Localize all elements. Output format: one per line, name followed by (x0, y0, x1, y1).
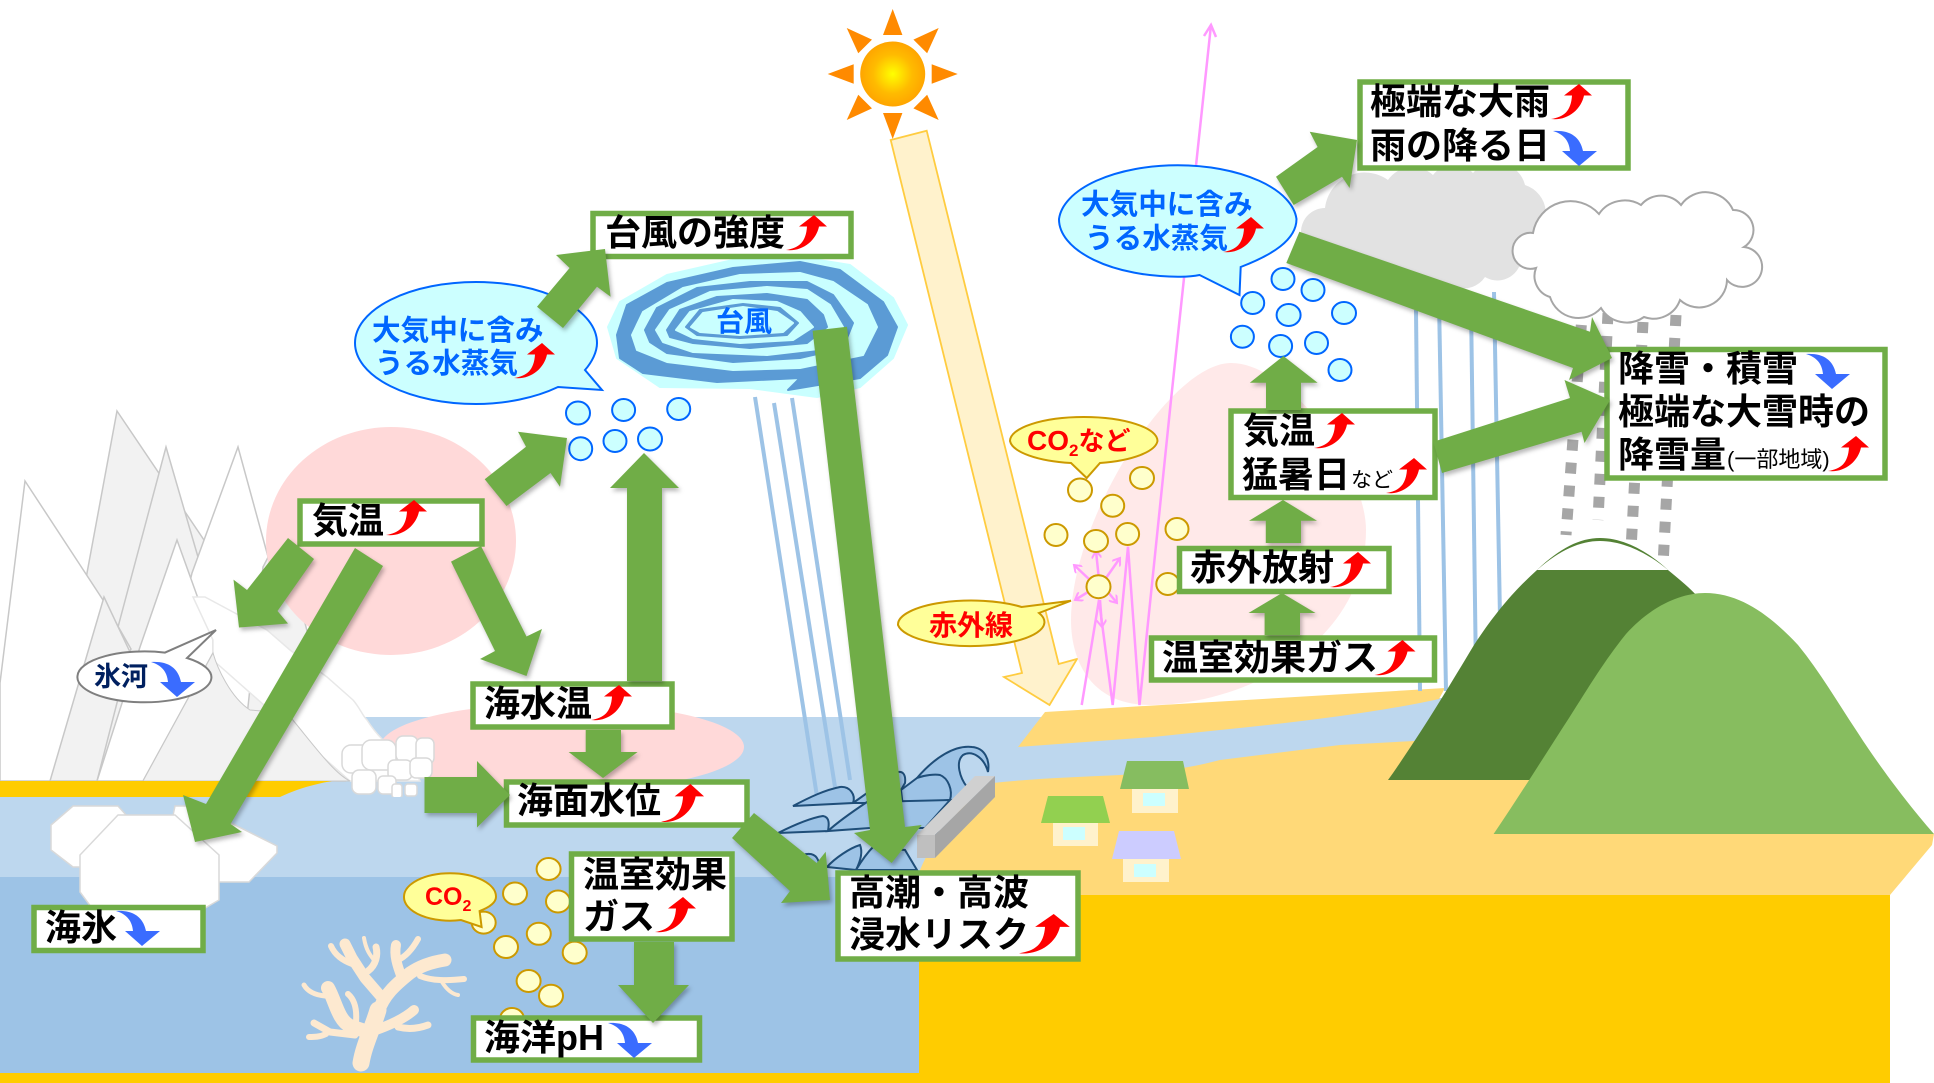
sea: upper layer (0, 797, 919, 1073)
snowfall dotted lines (1566, 302, 1676, 565)
ground cross-section (0, 895, 1890, 1083)
land: main sand (919, 741, 1934, 895)
sea ice (51, 806, 277, 911)
box: sea level: 海面水位 (517, 780, 661, 821)
house: light green roof (1041, 796, 1110, 846)
box: storm surge and flooding risk: 高潮・高波 (849, 872, 1029, 913)
callout: infrared: 赤外線 (929, 610, 1013, 641)
pink warm zone: right (1071, 363, 1366, 705)
CO2 particles: ocean (472, 858, 587, 1030)
arrow: temperature to sea ice (183, 548, 383, 842)
seawall (917, 776, 995, 858)
box: greenhouse gas in ocean: 温室効果 (583, 854, 727, 895)
box: sea level (506, 780, 747, 825)
white snow cloud (1513, 192, 1762, 323)
yellow ground band on the left (0, 781, 332, 797)
box: infrared radiation (1180, 547, 1389, 592)
water vapour drops: right (1231, 268, 1356, 381)
sun (828, 9, 958, 139)
box: snowfall: 極端な大雪時の (1618, 391, 1870, 432)
callout: water vapour left (355, 282, 602, 404)
callout: glacier (77, 630, 216, 702)
small broken ice pile (342, 736, 434, 798)
pink warm zone: left (266, 427, 516, 655)
box: snowfall: 降雪量(一部地域) (1618, 434, 1830, 475)
glacier (193, 597, 420, 781)
land: back sand strip (1018, 688, 1445, 747)
typhoon label: 台風 (716, 306, 772, 337)
box: infrared radiation: 赤外放射 (1190, 547, 1334, 588)
infrared radiation lines (1074, 25, 1216, 705)
arrow: greenhouse gas to infrared radiation (1248, 593, 1316, 635)
light mountain (1494, 593, 1934, 834)
dark mountain (1388, 538, 1700, 780)
callout: CO2 ocean (404, 873, 496, 927)
house: green roof (1120, 761, 1189, 813)
box: extreme rain and rainy days: 極端な大雨 (1370, 81, 1550, 122)
waves (778, 747, 988, 870)
arrow: water vapour to typhoon strength (537, 249, 611, 328)
arrow: ice melt to sea level (424, 761, 510, 828)
box: extreme rain and rainy days (1360, 81, 1628, 168)
house: purple roof (1112, 831, 1181, 882)
callout: infrared (898, 601, 1071, 646)
arrow: water vapour to snowfall (1286, 232, 1612, 380)
callout: CO2 atmosphere: 2 (1069, 441, 1078, 460)
arrow: temperature to water vapour (485, 432, 567, 506)
box: sea temperature (473, 683, 672, 727)
typhoon (608, 257, 907, 397)
box: temperature and extreme heat days (1231, 410, 1435, 498)
box: typhoon strength: 台風の強度 (605, 212, 785, 253)
arrow: sea temperature to water vapour (610, 453, 679, 681)
box: air temperature: 気温 (312, 500, 384, 541)
arrow: water vapour to extreme rain (1276, 132, 1357, 205)
arrow: typhoon to storm surge (813, 327, 922, 863)
box: ocean pH (474, 1017, 700, 1060)
box: greenhouse gas in atmosphere: 温室効果ガス (1162, 637, 1378, 678)
box: sea ice: 海氷 (45, 907, 117, 948)
gray rain cloud (1301, 162, 1546, 288)
rain lines: right (1416, 292, 1500, 691)
box: typhoon strength (593, 212, 851, 256)
box: greenhouse gas in ocean (572, 854, 732, 939)
callout: glacier: 氷河 (94, 662, 148, 692)
arrow: infrared radiation to temperature (1249, 500, 1317, 543)
water vapour drops: left (566, 398, 690, 460)
background: sea surface layer (270, 698, 1475, 895)
box: air temperature (300, 500, 482, 544)
coral (304, 938, 464, 1063)
callout: CO2 atmosphere (1010, 417, 1158, 478)
snowy mountains (0, 411, 345, 781)
callout: water vapour right (1059, 165, 1296, 295)
box: sea ice (34, 907, 203, 950)
callout: CO2 atmosphere: CO (1027, 425, 1069, 456)
callout: water vapour left: うる水蒸気 (375, 348, 518, 380)
box: storm surge and flooding risk: 浸水リスク (849, 914, 1029, 955)
arrow: sea temperature to sea level (569, 730, 638, 778)
box: extreme rain and rainy days: 雨の降る日 (1370, 125, 1550, 166)
callout: water vapour left: 大気中に含み (372, 315, 544, 347)
snow cap (1537, 541, 1668, 570)
box: ocean pH: 海洋pH (484, 1017, 604, 1058)
box: greenhouse gas in ocean: ガス (583, 896, 655, 937)
box: snowfall (1607, 348, 1885, 478)
callout: CO2 atmosphere: など (1078, 426, 1130, 456)
arrow: sea level to storm surge (732, 813, 830, 903)
callout: CO2 ocean: CO (425, 883, 462, 911)
typhoon rain (755, 397, 850, 803)
sunlight arrow (891, 131, 1077, 705)
arrow: temperature to sea temperature (451, 546, 542, 676)
arrow: temperature to snowfall (1433, 380, 1610, 473)
callout: CO2 ocean: 2 (462, 898, 472, 915)
box: snowfall: 降雪・積雪 (1618, 348, 1798, 389)
arrow: temperature to water vapour right (1250, 356, 1318, 410)
CO2 particles: atmosphere (1044, 467, 1188, 598)
arrow: temperature to glacier (234, 538, 314, 628)
box: temperature and extreme heat days: 気温 (1243, 410, 1315, 451)
box: storm surge and flooding risk (838, 872, 1078, 959)
box: sea temperature: 海水温 (484, 683, 592, 724)
glacier lower slope (143, 653, 350, 781)
callout: water vapour right: 大気中に含み (1081, 189, 1253, 221)
callout: water vapour right: うる水蒸気 (1085, 223, 1228, 255)
sea: lower layer (0, 877, 919, 1073)
box: temperature and extreme heat days: 猛暑日など (1242, 454, 1393, 495)
arrow: ocean greenhouse gas to pH (618, 942, 689, 1023)
background: pink warm zone over the sea (380, 703, 744, 791)
